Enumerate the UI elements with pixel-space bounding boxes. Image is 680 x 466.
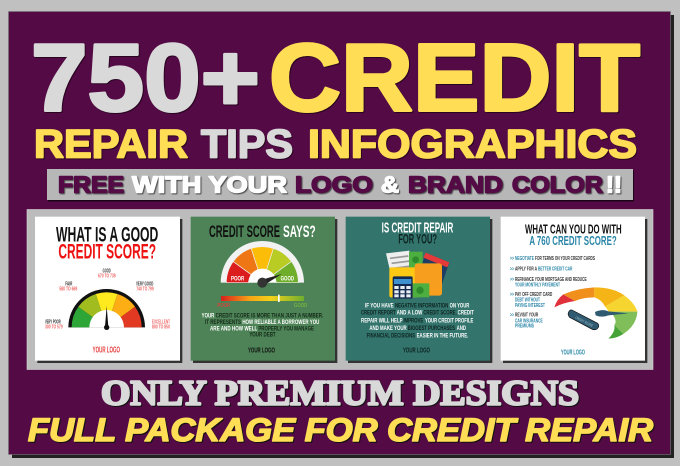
subtitle: repair tips infographics: [34, 122, 637, 166]
card 3 body text: EASIER IN THE FUTURE.: [417, 332, 468, 339]
card 2 body text: HOW RELIABLE A BORROWER YOU: [242, 319, 319, 326]
card 4 list of actions: >>: [510, 277, 514, 283]
card 2 score bar: GOOD: [294, 303, 307, 309]
card 1 score labels: 670 TO 739: [98, 273, 116, 279]
card 3 body text: AND A LOW: [397, 310, 423, 317]
card 1 score labels: VERY POOR: [45, 319, 61, 325]
card 1 score labels: EXCELLENT: [152, 319, 170, 325]
card 3 body text: FINANCIAL DECISIONS: [367, 332, 415, 339]
card 2 gauge: GOOD: [281, 277, 294, 283]
card 3 body text: IF YOU HAVE: [365, 302, 394, 309]
card 4 list of actions: DEBT WITHOUT: [515, 298, 540, 304]
card 2 body text: IT REPRESENTS: [205, 319, 241, 326]
title: 750+ CREDIT: 750+: [31, 24, 260, 132]
card 1 score labels: GOOD: [103, 268, 111, 274]
card 4 logo: YOUR LOGO: [561, 350, 585, 357]
card 4: what can you do with a 760 credit score: [501, 217, 647, 363]
footer line: full package for credit repair: FULL PACKAGE FOR CREDIT REPAIR: [28, 412, 653, 448]
card 4 list of actions: >>: [510, 292, 514, 298]
card 2 body text: YOUR: [202, 313, 214, 320]
card 4 tilted gauge: CREDIT SCORE: [575, 316, 594, 328]
card 3 body text: CREDIT: [458, 310, 474, 317]
card 1 score labels: FAIR: [65, 281, 72, 287]
card 3 illustration: documents, cards, calculator: [386, 251, 449, 299]
card 3 body text: [361, 302, 474, 339]
title: 750+ CREDIT: CREDIT: [269, 24, 640, 132]
card 1: what is a good credit score: [35, 217, 182, 363]
card 4 list of actions: YOUR MONTHLY PAYEMENT: [515, 282, 560, 288]
card 2 heading: SAYS?: [283, 222, 316, 241]
banner: free with your logo and brand color: &: [381, 172, 399, 198]
card 3: is credit repair for you: [346, 217, 492, 363]
banner: free with your logo and brand color: WITH YOUR: [132, 172, 287, 198]
card 2 body text: [202, 313, 323, 339]
card 2: credit score says: [191, 217, 337, 363]
card 1 score labels: 800 TO 850: [152, 324, 170, 330]
card 3 body text: NEGATIVE INFORMATION: [395, 302, 448, 309]
panel: grey card tray: [27, 210, 653, 370]
card 3 body text: AND MAKE YOUR: [369, 325, 407, 332]
card 4 heading: [525, 222, 622, 248]
card 1 score labels: [45, 268, 170, 330]
banner: free with your logo and brand color: BRAND: [408, 172, 503, 198]
card 3 body text: BIGGEST PURCHASES: [408, 325, 455, 332]
card 4 list of actions: PAYING INTEREST: [515, 303, 545, 309]
card 2 heading: CREDIT SCORE: [209, 222, 280, 241]
card 4 list of actions: [510, 256, 595, 330]
subtitle: repair tips infographics: TIPS: [201, 122, 293, 166]
card 4 heading: WHAT CAN YOU DO WITH: [525, 222, 622, 236]
card 4 tilted gauge: [554, 287, 637, 339]
card 4 list of actions: >>: [510, 266, 514, 272]
card 4 list of actions: >>: [510, 256, 514, 262]
card 1 heading: [56, 223, 158, 263]
card 3 body text: YOUR CREDIT PROFILE: [425, 317, 474, 324]
card 2 body text: YOUR DEBT: [249, 332, 276, 339]
card 4 heading: A 760 CREDIT SCORE?: [529, 234, 617, 248]
banner: free with your logo and brand color: [47, 169, 634, 202]
card 3 heading: IS CREDIT REPAIR: [382, 221, 454, 237]
card 4 list of actions: >>: [510, 313, 514, 319]
card 3 body text: REPAIR WILL HELP: [361, 317, 403, 324]
card 1 gauge: [68, 289, 145, 330]
card 1 score labels: 580 TO 669: [59, 287, 77, 293]
card 4 list of actions: PAY OFF CREDIT CARD: [515, 292, 552, 298]
card 1 score labels: VERY GOOD: [136, 281, 153, 287]
banner: free with your logo and brand color: FREE: [58, 172, 124, 198]
card 4 list of actions: REFINANCE YOUR MORTGAGE AND REDUCE: [515, 277, 587, 283]
card 2 score bar: [217, 295, 307, 309]
card 4 list of actions: CAR INSURANCE: [515, 318, 543, 324]
card 3 heading: [382, 221, 454, 247]
card 4 list of actions: FOR TERMS ON YOUR CREDIT CARDS: [535, 256, 595, 262]
card 4 list of actions: BETTER CREDIT CAR: [538, 266, 572, 272]
card 4 list of actions: REVISIT YOUR: [515, 313, 538, 319]
banner: free with your logo and brand color: LOGO: [295, 172, 373, 198]
card 1 score labels: 740 TO 799: [136, 287, 154, 293]
card 3 body text: CREDIT SCORE,: [423, 310, 457, 317]
card 4 list of actions: NEGOTIATE: [515, 256, 534, 262]
card 3 heading: FOR YOU?: [398, 231, 437, 247]
card 2 gauge: [221, 241, 304, 288]
footer line: only premium designs: ONLY PREMIUM DESIGNS: [101, 374, 579, 412]
card 1 score labels: 300 TO 579: [45, 324, 63, 330]
subtitle: repair tips infographics: INFOGRAPHICS: [308, 122, 637, 166]
card 3 body text: AND: [457, 325, 466, 332]
card 3 logo: YOUR LOGO: [403, 346, 430, 355]
card 2 logo: YOUR LOGO: [248, 346, 275, 355]
card 4 list of actions: APPLY FOR A: [515, 266, 537, 272]
card 2 score bar: POOR: [217, 303, 230, 309]
card 3 body text: ON YOUR: [450, 302, 469, 309]
banner: free with your logo and brand color: !!: [606, 172, 622, 198]
card 1 heading: CREDIT SCORE?: [58, 239, 156, 263]
card 1 logo: YOUR LOGO: [93, 346, 120, 355]
card 4 list of actions: PREMIUMS: [515, 324, 534, 330]
card 3 body text: CREDIT REPORT: [361, 310, 396, 317]
card 2 body text: PROPERLY YOU MANAGE: [258, 325, 314, 332]
subtitle: repair tips infographics: REPAIR: [34, 122, 188, 166]
card 1 heading: WHAT IS A GOOD: [56, 223, 158, 247]
card 2 body text: CREDIT SCORE IS MORE THAN JUST A NUMBER.: [216, 313, 323, 320]
banner: free with your logo and brand color: COLOR: [512, 172, 603, 198]
title: 750+ CREDIT: [31, 24, 640, 132]
card 2 gauge: POOR: [231, 277, 245, 283]
card 3 body text: IMPROVE: [403, 317, 424, 324]
card 2 body text: ARE AND HOW WELL: [210, 325, 257, 332]
